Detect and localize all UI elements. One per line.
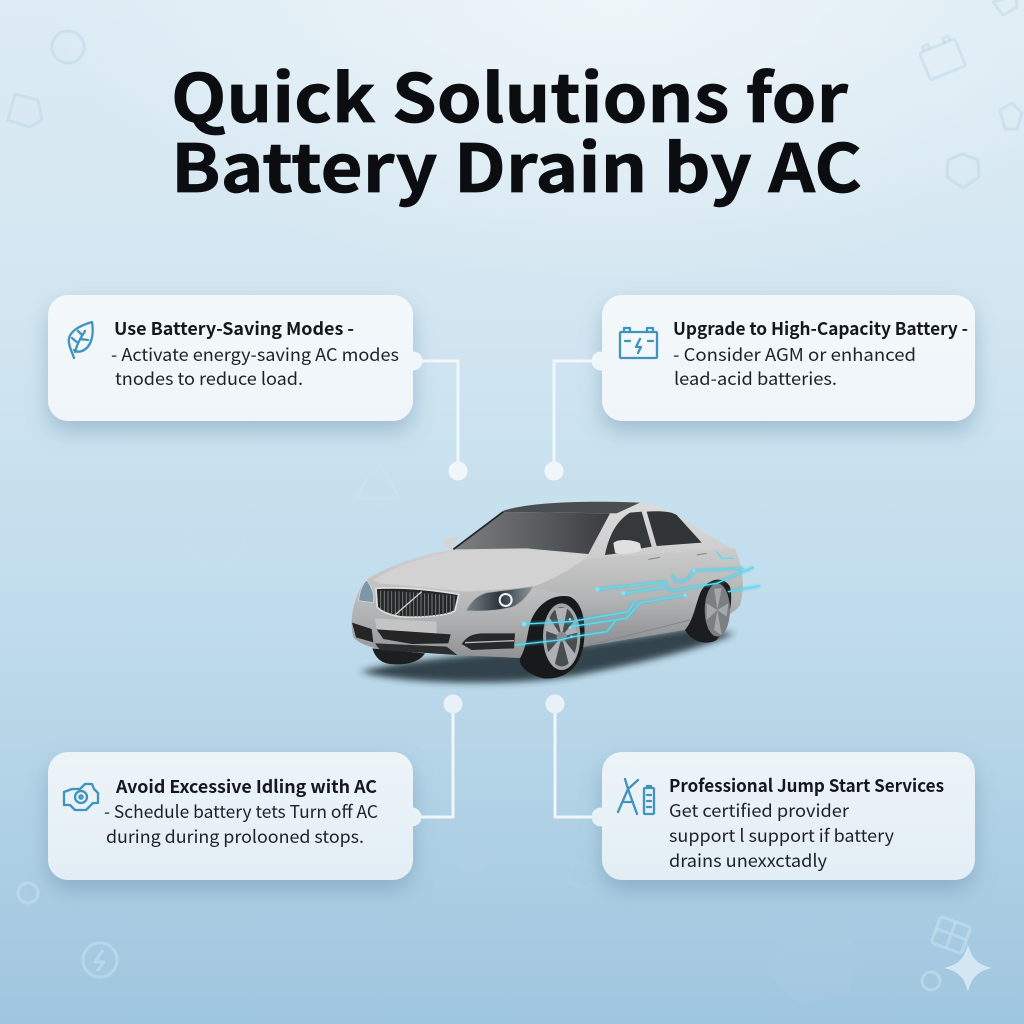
roof — [503, 502, 640, 513]
headlight ring — [500, 594, 512, 606]
windshield — [454, 512, 610, 554]
body text — [111, 342, 399, 391]
door handles and creases — [583, 553, 707, 647]
heading: Upgrade to High-Capacity Battery - — [673, 316, 968, 341]
car body — [352, 501, 743, 659]
panel: avoid idling — [48, 752, 413, 880]
rear wheel — [685, 580, 731, 643]
connector: bottom left — [402, 694, 462, 826]
body text: - Consider AGM or enhanced — [673, 342, 916, 367]
icon: jump clamps and battery — [618, 779, 654, 814]
left mirror — [443, 537, 459, 548]
side panel shading — [530, 548, 743, 647]
car illustration — [352, 501, 760, 683]
lower lip — [375, 643, 457, 655]
grille — [376, 588, 459, 617]
heading: Avoid Excessive Idling with AC — [115, 774, 377, 799]
body text: - Schedule battery tets Turn off AC — [104, 799, 378, 824]
body text: support l support if battery — [669, 823, 894, 848]
body text: - Activate energy-saving AC modes — [111, 342, 399, 367]
headlight right — [466, 587, 533, 611]
heading: Use Battery-Saving Modes - — [114, 316, 354, 341]
connector: top right — [544, 352, 610, 480]
side window front — [605, 512, 652, 555]
circuit lines glow — [515, 567, 760, 645]
side window rear — [647, 511, 702, 546]
right mirror — [613, 540, 642, 554]
panel: jump start services — [602, 752, 975, 880]
connector: top left — [404, 352, 468, 480]
body text: tnodes to reduce load. — [115, 366, 303, 391]
ground shadow — [360, 628, 735, 683]
heading: Professional Jump Start Services — [669, 773, 944, 798]
body text — [104, 799, 378, 849]
intake centre — [377, 629, 451, 644]
headlight left — [359, 580, 374, 603]
title — [171, 46, 862, 212]
front underside tyre — [372, 648, 425, 664]
icon: sparkle — [944, 944, 992, 992]
a-pillar — [453, 512, 503, 549]
panel: battery-saving modes — [48, 295, 413, 421]
circuit nodes — [522, 569, 696, 638]
body text: Get certified provider — [669, 798, 849, 823]
panel: high-capacity battery — [602, 295, 975, 421]
body text: lead-acid batteries. — [674, 366, 837, 391]
circuit lines — [515, 552, 760, 645]
icon: engine — [64, 784, 98, 810]
hood — [373, 549, 588, 592]
title line 1: Quick Solutions for — [171, 46, 848, 142]
body text — [673, 342, 916, 391]
icon: leaf — [69, 322, 93, 358]
front wheel — [520, 596, 585, 679]
intake left — [352, 623, 373, 642]
title line 2: Battery Drain by AC — [171, 116, 862, 212]
bumper plate — [375, 618, 437, 635]
body text — [669, 798, 894, 873]
body text: drains unexxctadly — [669, 848, 827, 873]
connector: bottom right — [546, 694, 610, 826]
body text: during during prolooned stops. — [106, 824, 364, 849]
intake right — [462, 633, 515, 650]
icon: battery — [620, 328, 657, 358]
